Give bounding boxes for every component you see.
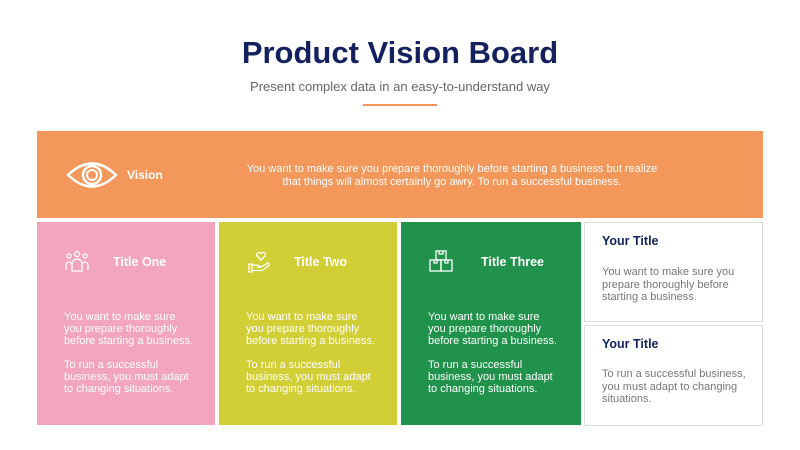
panel: your title 1 xyxy=(584,222,763,322)
body xyxy=(602,368,746,405)
panel: title one xyxy=(37,222,215,425)
accent line xyxy=(363,104,437,106)
heading: Your Title xyxy=(602,337,658,351)
panel: title three xyxy=(401,222,581,425)
heading: Title Two xyxy=(294,255,347,269)
vision text: You want to make sure you prepare thoroughly before starting a business but realize that things will almost certainly go awry. To run a successful business. xyxy=(247,163,657,188)
body: You want to make sure xyxy=(428,311,540,323)
heading: Your Title xyxy=(602,234,658,248)
title: Product Vision Board xyxy=(242,35,558,70)
panel: your title 2 xyxy=(584,325,763,426)
body: you prepare thoroughly xyxy=(246,323,359,335)
body: you must adapt to changing xyxy=(602,380,737,392)
body: prepare thoroughly before xyxy=(602,278,729,290)
body: You want to make sure xyxy=(246,311,358,323)
panel: title two xyxy=(219,222,397,425)
panel: vision xyxy=(37,131,763,218)
subtitle: Present complex data in an easy-to-understand way xyxy=(250,79,550,94)
body: To run a successful business, xyxy=(602,368,746,380)
icon: boxes xyxy=(429,250,453,272)
body: To run a successful xyxy=(64,359,158,371)
body: before starting a business. xyxy=(246,335,375,347)
body: situations. xyxy=(602,393,652,405)
body: starting a business. xyxy=(602,291,697,303)
body xyxy=(64,311,193,395)
body: to changing situations. xyxy=(246,383,355,395)
body: To run a successful xyxy=(428,359,522,371)
body: before starting a business. xyxy=(428,335,557,347)
icon: people xyxy=(65,250,89,272)
body: To run a successful xyxy=(246,359,340,371)
heading: Title One xyxy=(113,255,166,269)
vision label: Vision xyxy=(127,168,163,182)
body: to changing situations. xyxy=(428,383,537,395)
body xyxy=(246,311,375,395)
body: You want to make sure you xyxy=(602,266,734,278)
body: business, you must adapt xyxy=(64,371,189,383)
body: You want to make sure xyxy=(64,311,176,323)
body: you prepare thoroughly xyxy=(64,323,177,335)
heading: Title Three xyxy=(481,255,544,269)
icon: eye xyxy=(66,162,118,188)
body xyxy=(428,311,557,395)
icon: hand heart xyxy=(248,252,270,273)
body: before starting a business. xyxy=(64,335,193,347)
body: you prepare thoroughly xyxy=(428,323,541,335)
body: business, you must adapt xyxy=(428,371,553,383)
body: business, you must adapt xyxy=(246,371,371,383)
body xyxy=(602,266,734,303)
body: to changing situations. xyxy=(64,383,173,395)
